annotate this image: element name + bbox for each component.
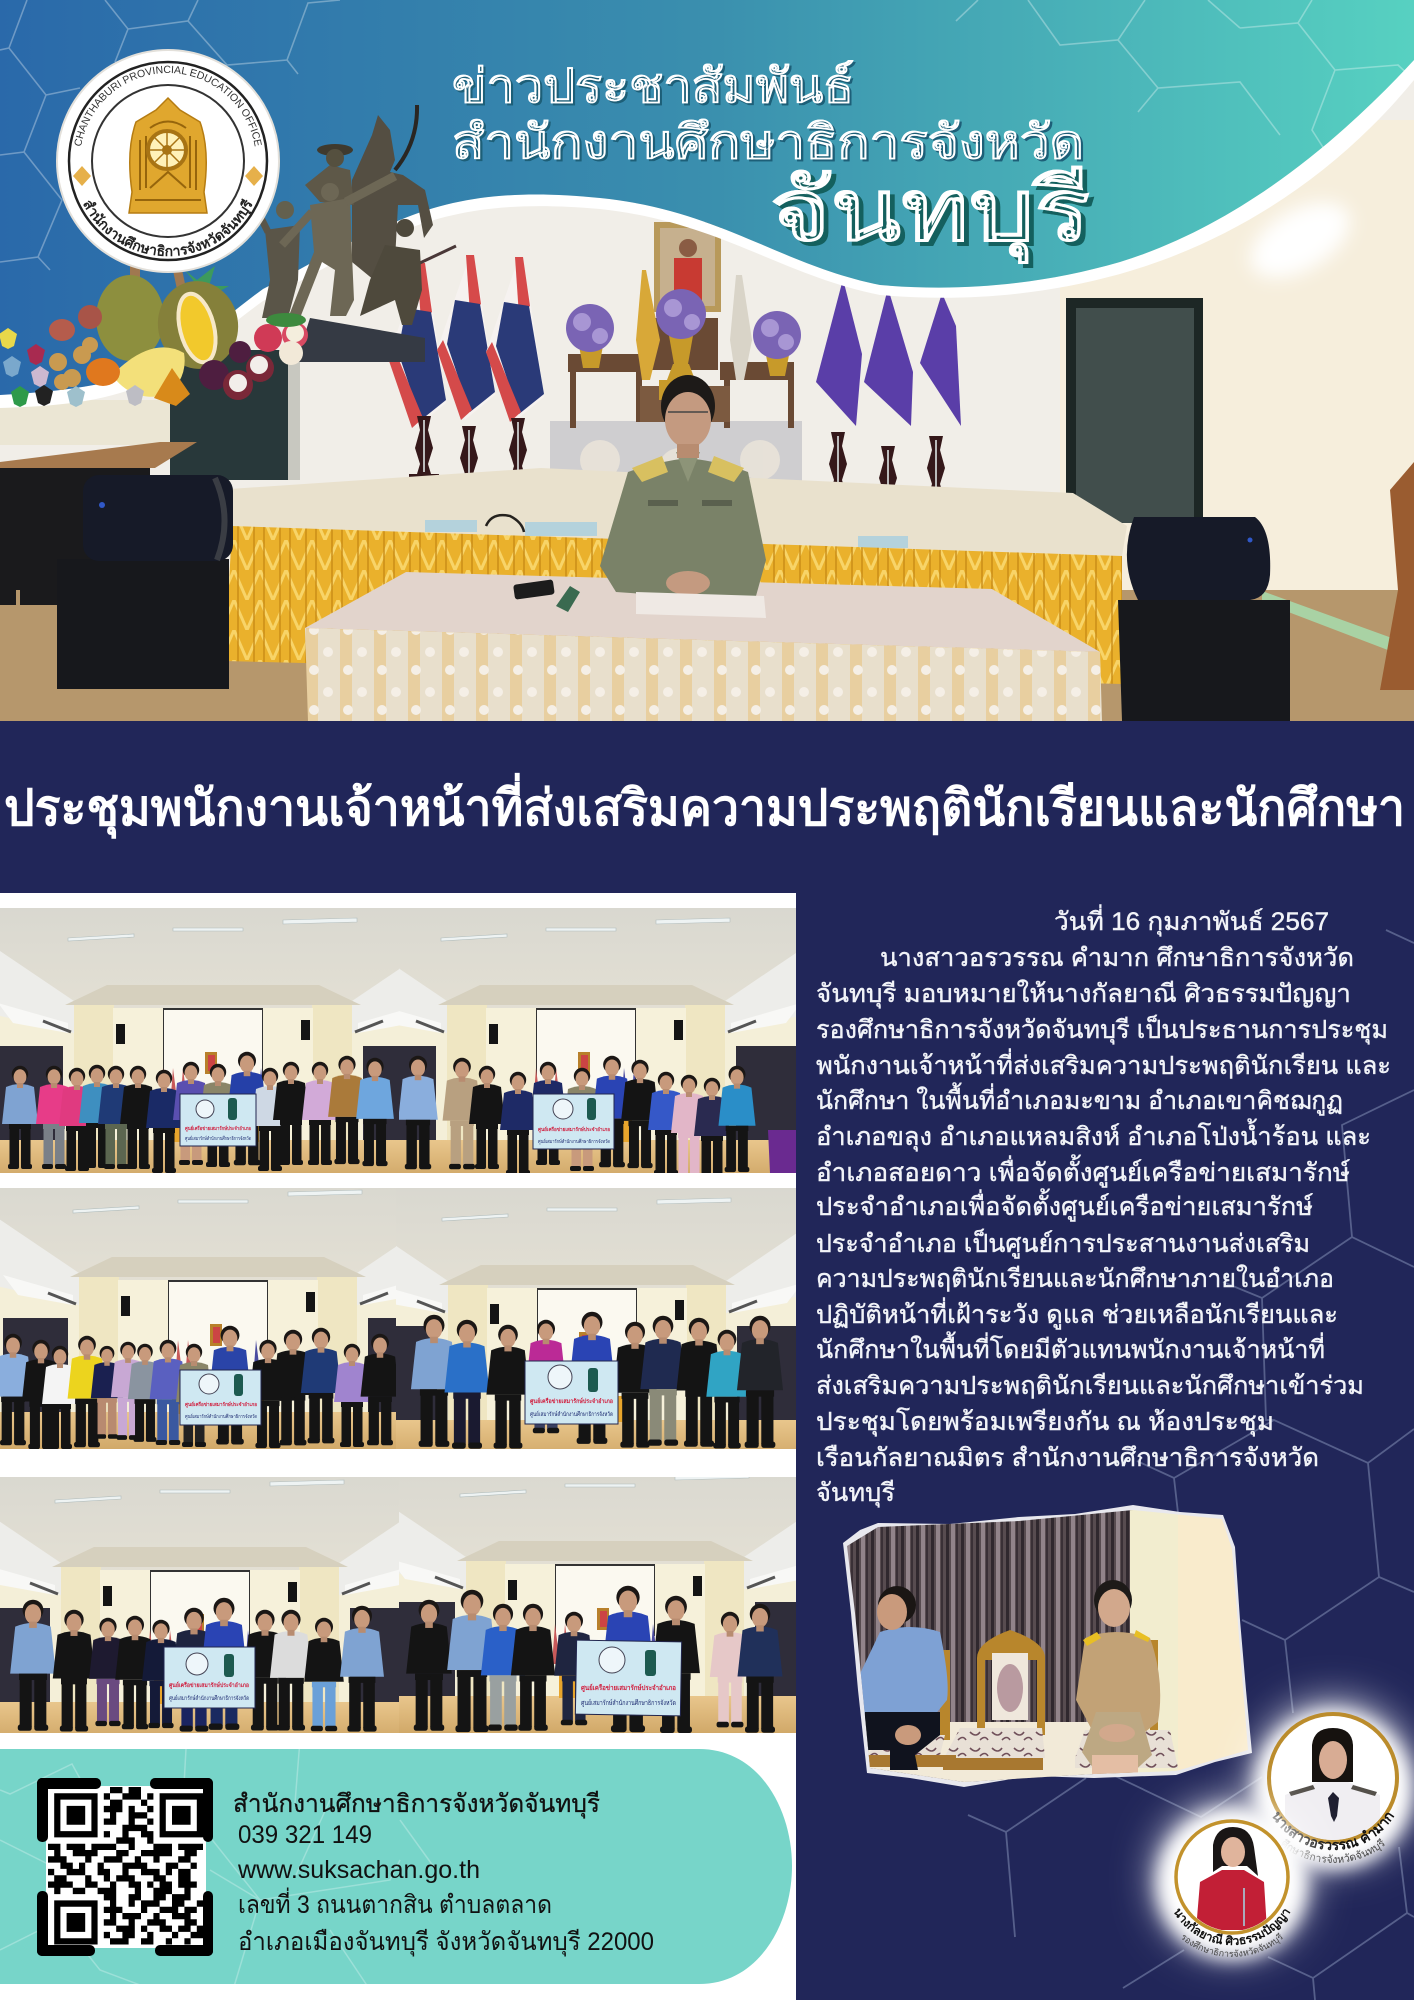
panel: header gradient wave banner [0, 0, 1414, 408]
logo: provincial education office seal: สำนักงานศึกษาธิการจังหวัดจันทบุรี [84, 198, 252, 256]
flowers and vases [566, 270, 801, 400]
right wall [1060, 120, 1414, 620]
contact text: อำเภอเมืองจันทบุรี จังหวัดจันทบุรี 22000 [238, 1928, 654, 1957]
portrait badge: deputy director: รองศึกษาธิการจังหวัดจันทบุรี [1182, 1932, 1282, 1957]
woman seated at table [600, 375, 766, 598]
text block: article body: นักศึกษาในพื้นที่โดยมีตัวแทนพนักงานเจ้าหน้าที่ [816, 1331, 1325, 1364]
contact text: 039 321 149 [238, 1821, 372, 1849]
portrait of royal figure [654, 222, 721, 312]
photo 1 [0, 908, 399, 1173]
title: header lines: ข่าวประชาสัมพันธ์ [452, 59, 854, 113]
text block: article body: วันที่ 16 กุมภาพันธ์ 2567 [1054, 904, 1329, 937]
door [1066, 298, 1203, 523]
sign held in photo 6 [575, 1640, 682, 1716]
contact text: เลขที่ 3 ถนนตากสิน ตำบลตลาด [238, 1887, 552, 1919]
text block: article body: นางสาวอรวรรณ คำมาก ศึกษาธิการจังหวัด [880, 944, 1354, 972]
flag stands [409, 416, 945, 487]
Thai flags [388, 255, 544, 428]
sign held in photo 1: ศูนย์เครือข่ายเสมารักษ์ประจำอำเภอ [185, 1125, 251, 1133]
floor [0, 590, 1414, 721]
text block: article body: ประจำอำเภอ เป็นศูนย์การประสานงานส่งเสริม [816, 1228, 1310, 1259]
title: header lines: สำนักงานศึกษาธิการจังหวัด [452, 117, 1084, 169]
sign held in photo 5: ศูนย์เสมารักษ์สำนักงานศึกษาธิการจังหวัด [169, 1694, 249, 1702]
sign held in photo 6: ศูนย์เสมารักษ์สำนักงานศึกษาธิการจังหวัด [581, 1698, 676, 1707]
panel: contact block [0, 1740, 792, 2000]
wooden side table [0, 442, 197, 468]
logo: provincial education office seal: CHANTHABURI PROVINCIAL EDUCATION OFFICE [74, 66, 262, 146]
text block: article body: อำเภอสอยดาว เพื่อจัดตั้งศูนย์เครือข่ายเสมารักษ์ [816, 1154, 1351, 1188]
QR code [37, 1778, 213, 1956]
panel: white left column [0, 893, 796, 2000]
portrait badge: deputy director [1126, 1771, 1338, 1984]
text block: article body: ประชุมโดยพร้อมเพรียงกัน ณ ห้องประชุม [816, 1407, 1274, 1437]
purple flags [816, 279, 961, 426]
sign held in photo 2 [533, 1094, 614, 1149]
sign held in photo 4 [525, 1361, 618, 1424]
left chair [866, 1650, 956, 1767]
decorative hexagon lines on header [0, 0, 1414, 270]
center gold chair [943, 1630, 1045, 1770]
text block: article body: นักศึกษา ในพื้นที่อำเภอมะขาม อำเภอเขาคิชฌกูฏ [816, 1082, 1343, 1116]
right speaker [1118, 517, 1290, 721]
sign held in photo 1: ศูนย์เสมารักษ์สำนักงานศึกษาธิการจังหวัด [185, 1135, 251, 1142]
stage yellow skirt [225, 526, 1122, 684]
left speaker [57, 475, 233, 689]
sign held in photo 4: ศูนย์เสมารักษ์สำนักงานศึกษาธิการจังหวัด [530, 1410, 613, 1418]
stage top [230, 468, 1127, 556]
dark curtain at left [170, 350, 288, 480]
photo 4 [396, 1188, 796, 1449]
portrait badge: provincial education director: นางสาวอรวรรณ คำมาก [1272, 1812, 1394, 1850]
altar tables [568, 318, 794, 428]
photo 6 [399, 1477, 796, 1733]
decorative hexagon lines on navy [968, 930, 1414, 2000]
sign held in photo 3: ศูนย์เครือข่ายเสมารักษ์ประจำอำเภอ [185, 1401, 257, 1409]
sign held in photo 2: ศูนย์เสมารักษ์สำนักงานศึกษาธิการจังหวัด [538, 1138, 610, 1145]
paper, phone and microphone [513, 579, 766, 618]
sign held in photo 3: ศูนย์เสมารักษ์สำนักงานศึกษาธิการจังหวัด [185, 1413, 257, 1420]
logo: provincial education office seal [56, 49, 280, 273]
sign held in photo 5: ศูนย์เครือข่ายเสมารักษ์ประจำอำเภอ [169, 1681, 249, 1690]
text block: article body: อำเภอขลุง อำเภอแหลมสิงห์ อำเภอโป่งน้ำร้อน และ [816, 1118, 1371, 1152]
text block: article body: ปฏิบัติหน้าที่เฝ้าระวัง ดูแล ช่วยเหลือนักเรียนและ [816, 1297, 1338, 1330]
text block: article body: เรือนกัลยาณมิตร สำนักงานศึกษาธิการจังหวัด [816, 1444, 1319, 1472]
photo 5 [0, 1477, 399, 1733]
woman in khaki uniform [1076, 1580, 1160, 1777]
contact text: สำนักงานศึกษาธิการจังหวัดจันทบุรี [233, 1790, 600, 1819]
portrait badge: provincial education director: ศึกษาธิการจังหวัดจันทบุรี [1282, 1838, 1384, 1863]
panel: header photo of meeting stage [0, 0, 1414, 721]
photo 2 [399, 908, 796, 1173]
table top [305, 572, 1100, 652]
text block: article body [816, 904, 1391, 1508]
text block: article body: จันทบุรี [816, 1479, 895, 1508]
text block: article body: รองศึกษาธิการจังหวัดจันทบุรี เป็นประธานการประชุม [816, 1014, 1388, 1045]
text block: article body: ส่งเสริมความประพฤตินักเรียนและนักศึกษาเข้าร่วม [816, 1372, 1364, 1400]
sign held in photo 5 [164, 1647, 255, 1708]
text block: article body: พนักงานเจ้าหน้าที่ส่งเสริมความประพฤตินักเรียน และ [816, 1048, 1391, 1080]
portrait badge: provincial education director [1222, 1672, 1414, 1892]
text block: article body: ประจำอำเภอเพื่อจัดตั้งศูนย์เครือข่ายเสมารักษ์ [816, 1188, 1314, 1222]
right chair [1075, 1640, 1178, 1768]
contact text: www.suksachan.go.th [237, 1856, 480, 1884]
chair at right edge [1380, 462, 1414, 690]
sign held in photo 3 [180, 1370, 261, 1425]
fruits and gems cluster [0, 252, 308, 407]
photo: torn-edge portrait of two officials [843, 1500, 1252, 1790]
text block: article body: ความประพฤตินักเรียนและนักศึกษาภายในอำเภอ [816, 1264, 1334, 1293]
man in blue shirt [857, 1586, 948, 1770]
statue of King Taksin on horseback [258, 105, 456, 362]
sign held in photo 4: ศูนย์เครือข่ายเสมารักษ์ประจำอำเภอ [530, 1397, 613, 1406]
contact text [233, 1790, 654, 1957]
sign held in photo 1 [180, 1094, 256, 1146]
altar cloth [550, 421, 802, 480]
title: header lines: จันทบุรี [770, 163, 1090, 264]
text block: article body: จันทบุรี มอบหมายให้นางกัลยาณี ศิวธรรมปัญญา [816, 979, 1351, 1009]
portrait badge: deputy director: นางกัลยาณี ศิวธรรมปัญญา [1174, 1908, 1290, 1946]
sign held in photo 2: ศูนย์เครือข่ายเสมารักษ์ประจำอำเภอ [538, 1126, 610, 1134]
sign held in photo 6: ศูนย์เครือข่ายเสมารักษ์ประจำอำเภอ [581, 1683, 676, 1693]
photo 3 [0, 1188, 396, 1449]
title: header lines [452, 59, 1090, 264]
